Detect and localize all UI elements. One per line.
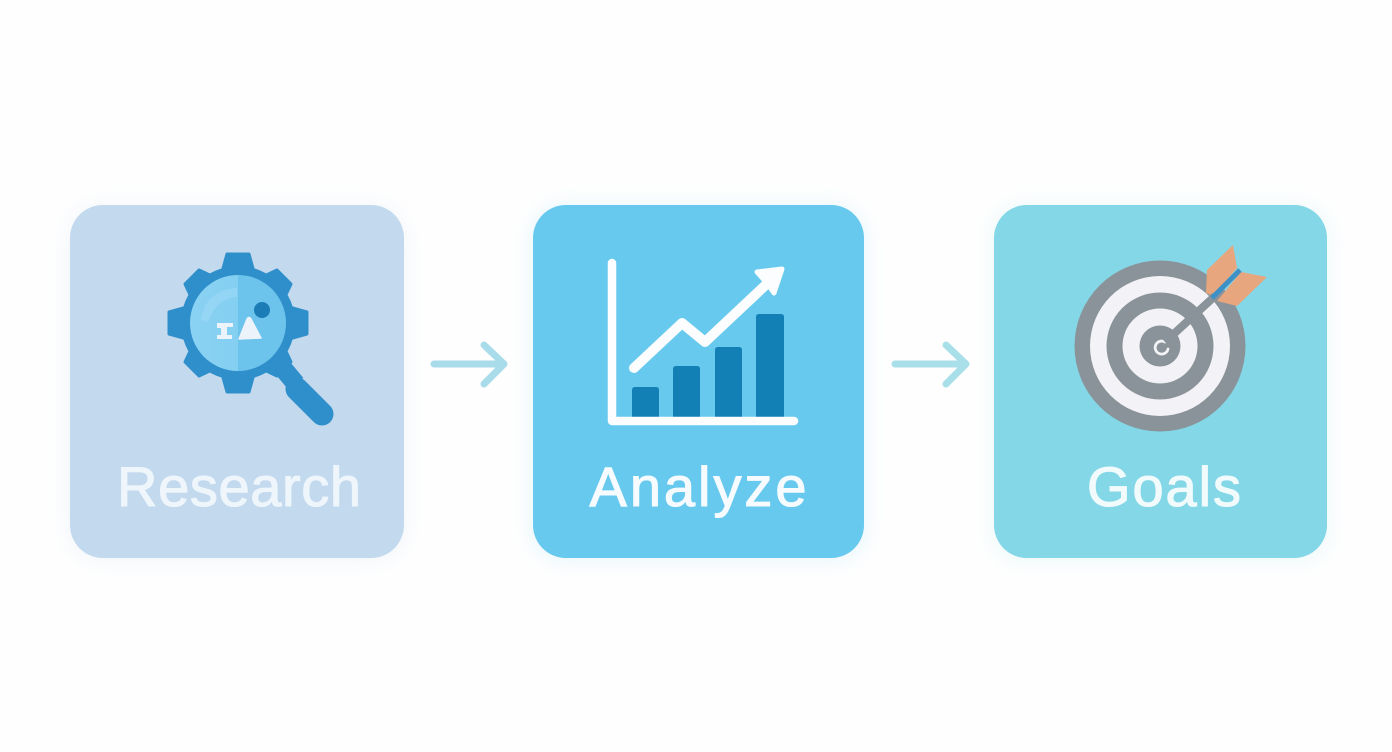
panel: research: [66, 203, 408, 563]
panel: analyze: [529, 203, 868, 563]
label: goals: Goals: [1087, 455, 1241, 518]
axes: [612, 263, 794, 421]
label: analyze: Analyze: [590, 455, 806, 518]
panel: goals: [990, 203, 1331, 563]
arrow fletching: [1206, 245, 1267, 306]
arrow: research to analyze: [434, 345, 504, 384]
label: research: Research: [117, 455, 361, 518]
icon: bar chart with rising arrow: [612, 263, 794, 421]
icon: target with arrow: [1074, 245, 1267, 432]
bars: [632, 314, 784, 417]
arrow: analyze to goals: [895, 345, 966, 384]
trend arrow: [634, 269, 782, 368]
icon: gear magnifying glass: [169, 254, 322, 414]
